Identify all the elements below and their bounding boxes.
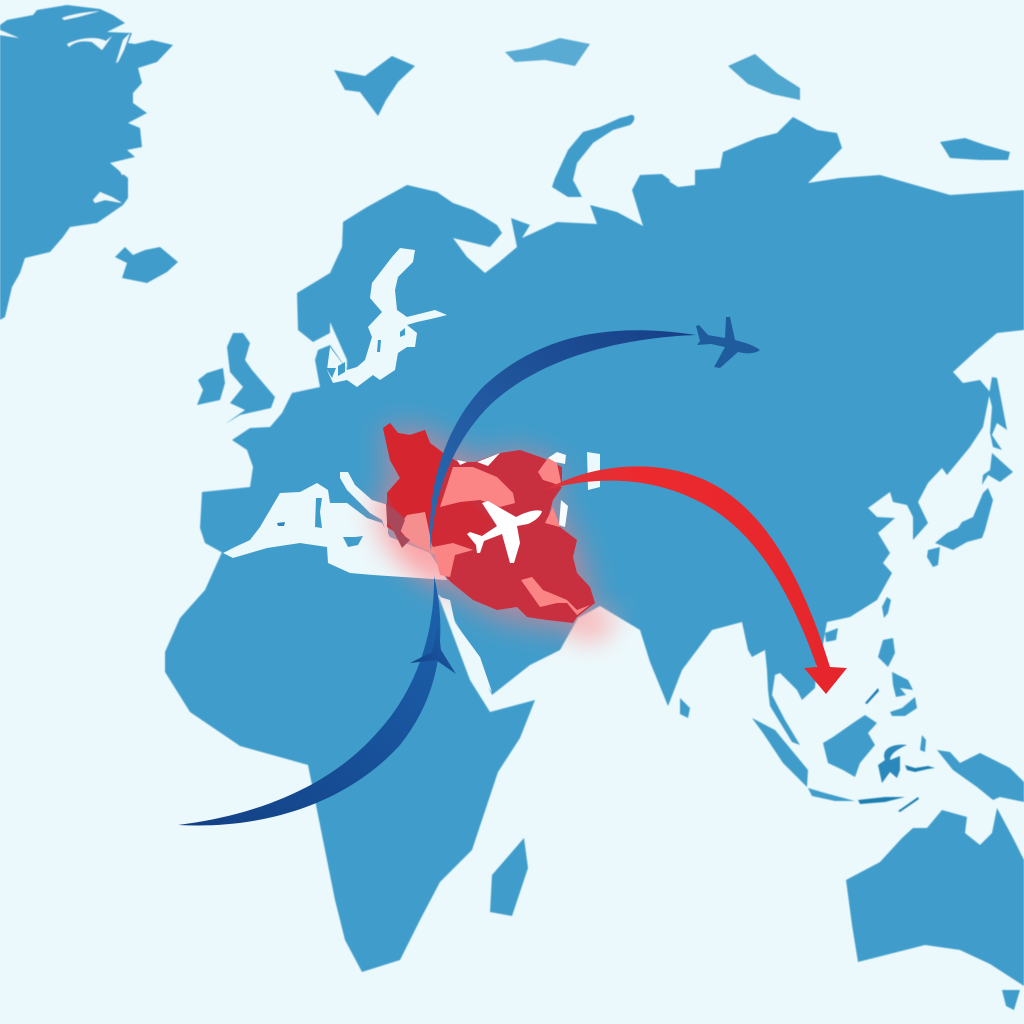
highlighted region outer glow	[372, 428, 595, 630]
region: Caspian pink	[538, 458, 562, 487]
landmass: Mindanao	[890, 697, 917, 716]
arrow barbs	[410, 625, 456, 674]
route: blue arc from upper right	[430, 330, 696, 552]
region: Caspian south pink	[545, 507, 560, 527]
region: Mediterranean pink	[433, 543, 473, 577]
sea: Adriatic	[340, 472, 388, 537]
landmass: Halmahera	[920, 735, 926, 752]
sea: Mediterranean	[223, 483, 447, 580]
pink fade on the Arabian coast	[575, 610, 625, 645]
landmass: Franz Josef Land	[505, 38, 590, 66]
arc body	[178, 576, 440, 826]
highlighted region: Iran and surroundings	[383, 423, 595, 623]
region: Persian Gulf pink	[521, 577, 590, 615]
landmass: Novaya Zemlya	[552, 115, 634, 197]
landmass: Africa	[165, 535, 535, 972]
landmass: Java	[808, 788, 855, 801]
region: Aegean pink	[398, 512, 436, 555]
landmass: Tasmania	[1002, 990, 1020, 1010]
landmass: Hainan	[825, 628, 838, 642]
landmass: Seram	[905, 765, 935, 772]
islands: Danish	[326, 362, 345, 378]
sea: Red Sea	[440, 597, 492, 692]
landmass: Severnaya Zemlya	[728, 54, 800, 100]
route: blue arc from lower left with arrow barbs	[178, 576, 456, 826]
region: white coast slivers	[457, 452, 568, 527]
region: Black Sea pink	[440, 467, 515, 507]
landmass: Eurasia	[200, 117, 1024, 745]
landmass: Borneo	[823, 715, 877, 777]
island: Sicily	[343, 536, 363, 547]
islands: Baltic	[377, 328, 405, 352]
Greenland fjords	[0, 11, 130, 203]
sea: Baltic	[327, 248, 447, 387]
landmass: Ireland	[197, 368, 225, 405]
pink fade across the Mediterranean	[392, 510, 445, 578]
landmass: Iceland	[115, 247, 178, 283]
landmass: Honshu	[935, 488, 993, 550]
landmass: Visayas	[892, 672, 913, 697]
sea: Caspian slivers	[587, 452, 600, 490]
landmass: Luzon	[878, 638, 895, 667]
landmass: Australia	[846, 808, 1024, 986]
landmass: Great Britain	[225, 333, 275, 424]
region: red territory	[383, 423, 595, 623]
landmass: Sumatra	[752, 718, 808, 787]
route: red arrow to Southeast Asia	[545, 466, 847, 694]
landmass: Sri Lanka	[680, 698, 690, 718]
landmass: Greenland	[0, 5, 173, 320]
landmass: Kyushu	[927, 547, 940, 567]
inland seas and gulfs	[223, 248, 600, 692]
icon: white plane	[467, 501, 542, 563]
region: brighter west part	[383, 423, 442, 545]
Mediterranean islands	[277, 328, 405, 547]
landmass: Sakhalin	[989, 377, 1007, 450]
island: Balearic	[277, 522, 285, 526]
landmass: Madagascar	[490, 838, 528, 916]
region: central red band	[432, 500, 490, 548]
landmass: Palawan	[865, 688, 879, 704]
region: Greece dusky patch	[386, 503, 410, 548]
landmass: Svalbard	[334, 56, 415, 116]
landmass: New Siberian Islands	[940, 138, 1010, 160]
island: Sardinia and Corsica	[315, 498, 322, 528]
landmass: Hokkaido	[982, 453, 1013, 485]
landmass: Taiwan	[882, 597, 891, 618]
landmass: New Guinea	[937, 750, 1024, 802]
landmass: Sulawesi	[878, 745, 907, 783]
icon: dark blue plane	[696, 317, 760, 368]
landmass: Lesser Sunda	[858, 797, 919, 812]
